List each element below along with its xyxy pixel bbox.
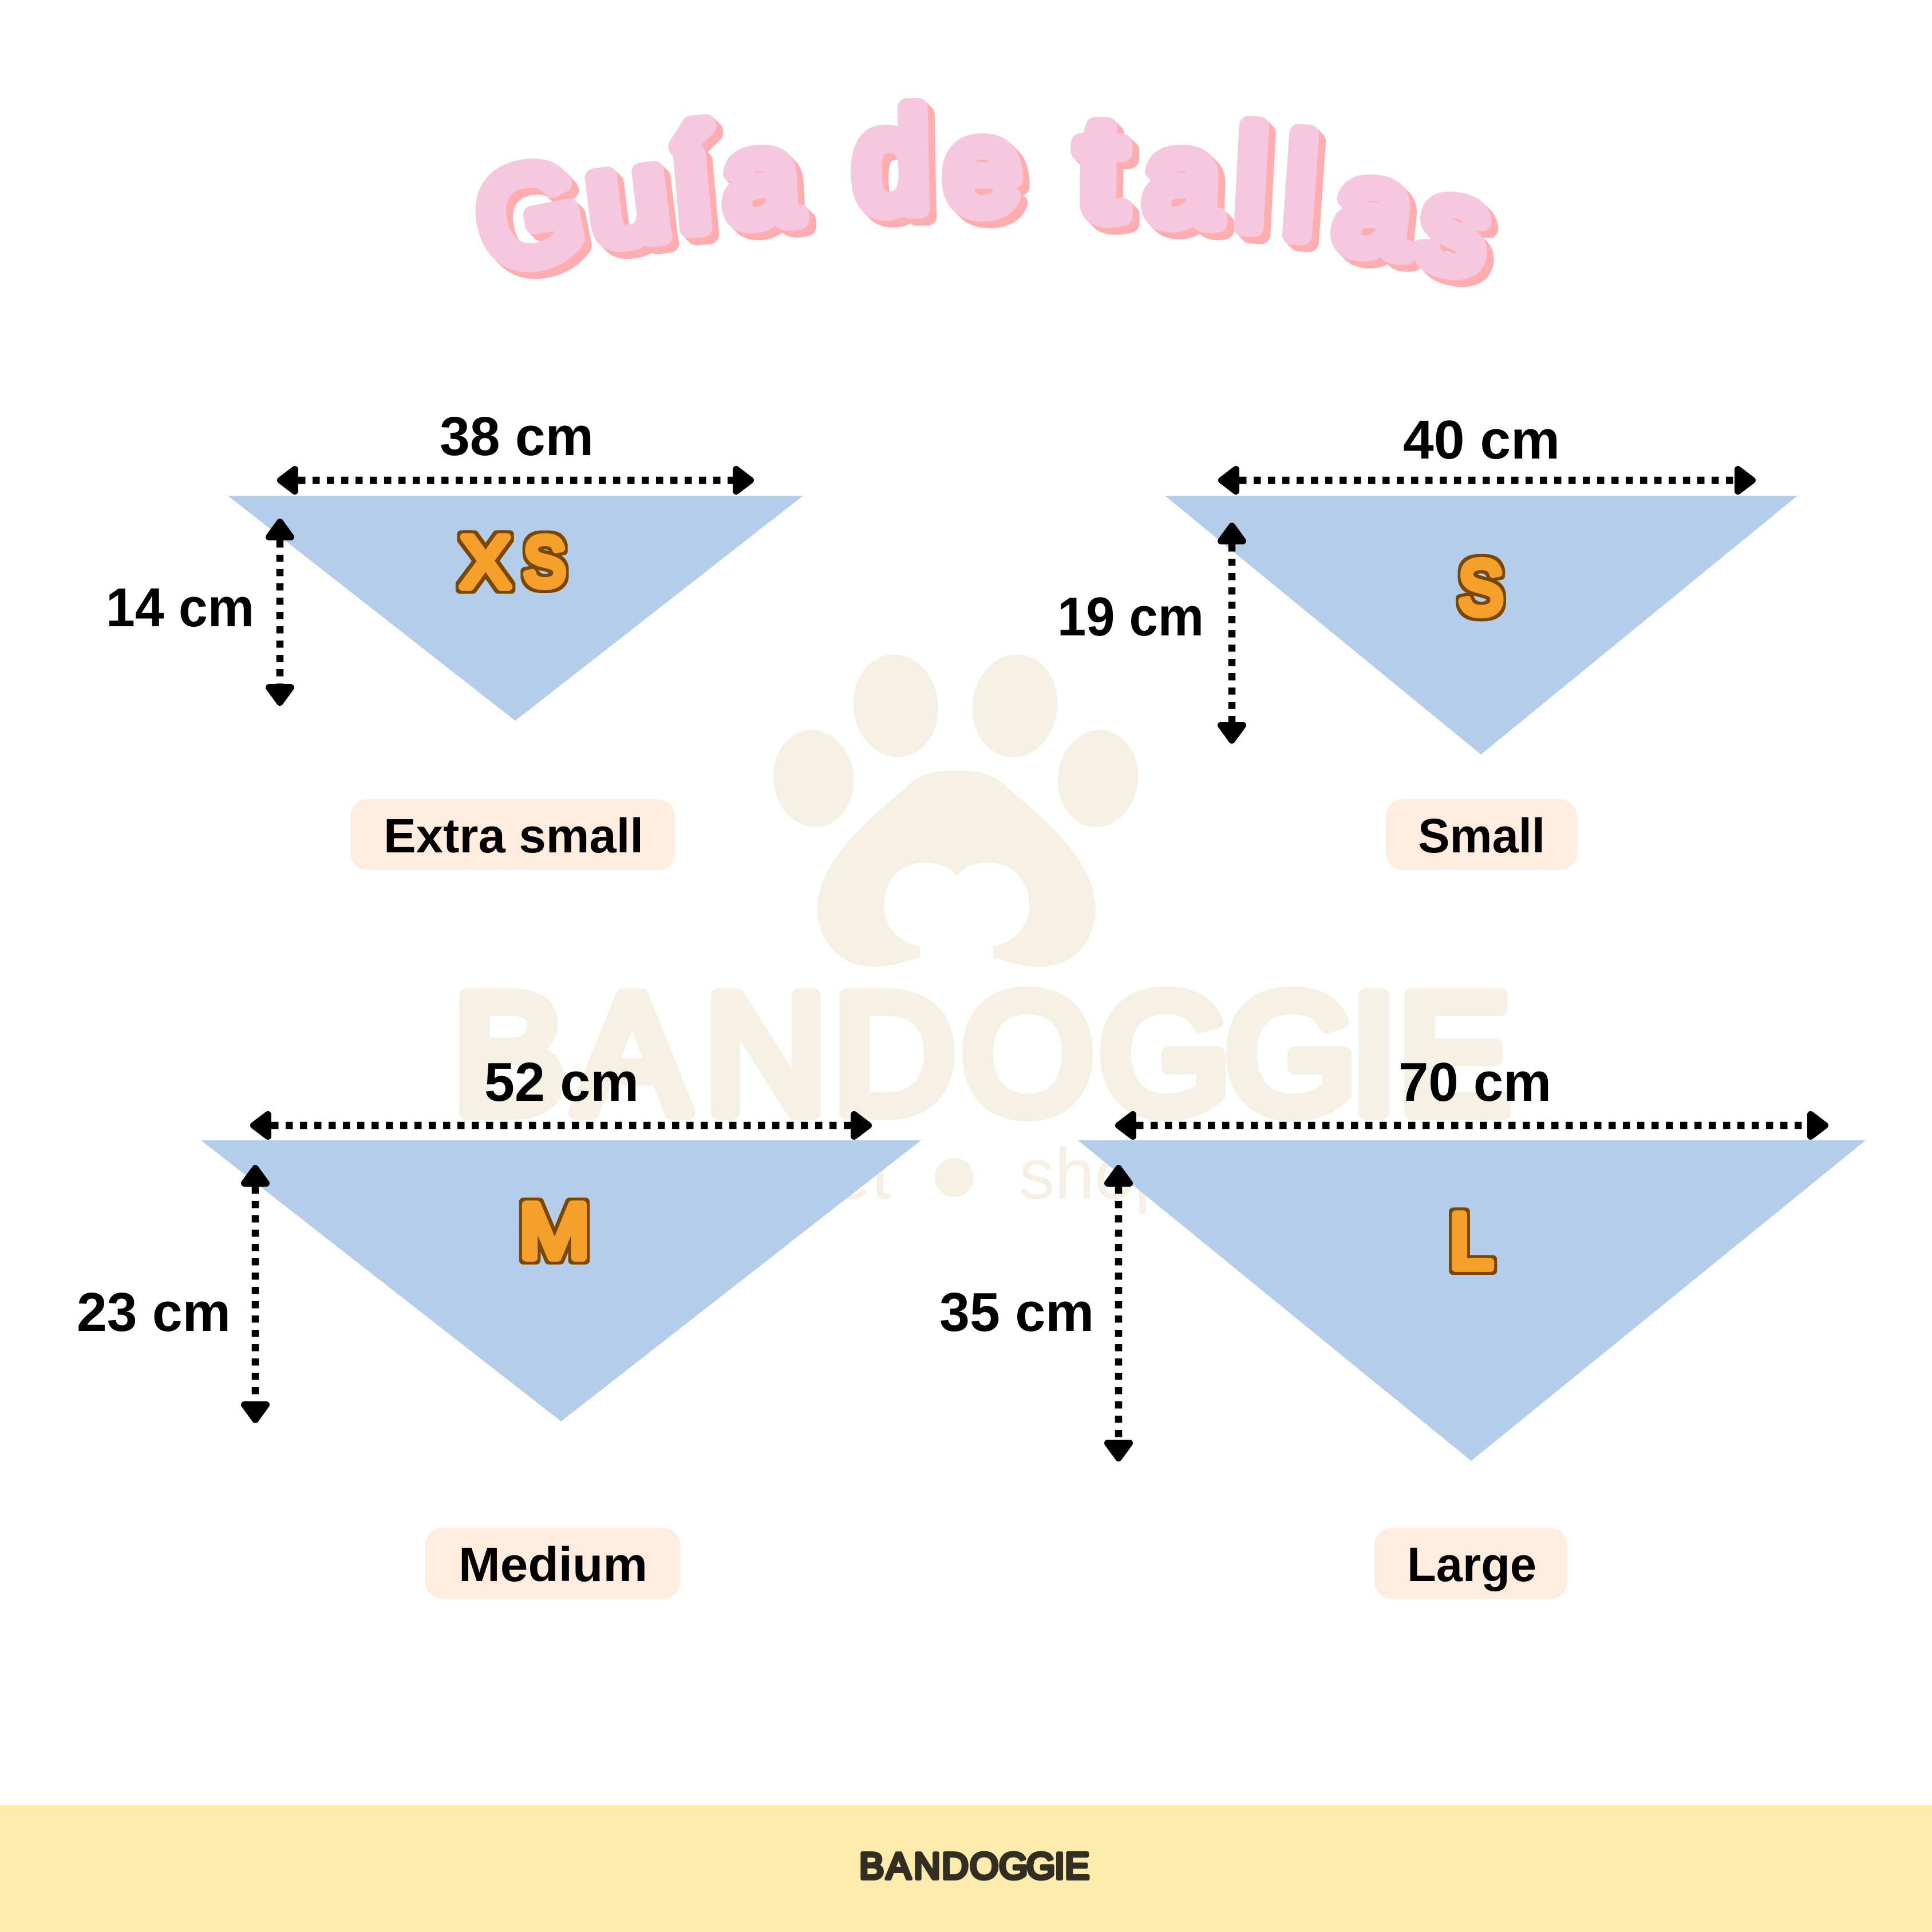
width label L: 70 cm xyxy=(1398,1052,1551,1113)
height label M: 23 cm xyxy=(77,1282,231,1343)
bandana triangle XS xyxy=(228,496,803,721)
width arrow XS xyxy=(280,469,750,491)
size letter S: S xyxy=(1459,546,1503,630)
width arrow S xyxy=(1222,469,1752,491)
footer band xyxy=(0,1805,1932,1932)
watermark tagline dot xyxy=(935,1158,974,1197)
title: í xyxy=(665,101,718,260)
size letter L: L xyxy=(1449,1198,1493,1285)
size name pill S xyxy=(1386,799,1577,870)
size name pill XS: Extra small xyxy=(384,809,643,863)
size name pill M xyxy=(425,1528,680,1599)
panel: L bandana xyxy=(939,1052,1866,1599)
title: a xyxy=(720,106,801,252)
title xyxy=(465,82,1499,302)
panel: S bandana xyxy=(1057,409,1797,870)
height arrow M xyxy=(244,1168,266,1420)
title: t xyxy=(1078,90,1125,247)
title: G xyxy=(465,133,594,298)
panel: XS bandana xyxy=(106,406,803,870)
title: e xyxy=(945,96,1020,239)
panel: M bandana xyxy=(77,1052,921,1599)
title: d xyxy=(853,82,930,240)
watermark: Bandoggie logo xyxy=(453,650,1511,1214)
title: a xyxy=(1329,134,1418,283)
size letters XS: S xyxy=(524,524,566,600)
height label S: 19 cm xyxy=(1057,586,1204,647)
height label L: 35 cm xyxy=(939,1282,1094,1343)
bandana triangle L xyxy=(1078,1140,1866,1461)
width arrow M xyxy=(254,1115,868,1136)
size letters XS: X xyxy=(461,521,510,602)
width label XS: 38 cm xyxy=(440,406,594,467)
height arrow XS xyxy=(269,522,291,702)
width arrow L xyxy=(1119,1115,1825,1136)
title: l xyxy=(1281,108,1320,266)
title: l xyxy=(1232,101,1270,258)
size name pill L xyxy=(1374,1528,1567,1599)
bandana triangle M xyxy=(201,1140,921,1421)
size name pill L: Large xyxy=(1407,1538,1536,1591)
size letter M: M xyxy=(520,1188,590,1274)
size name pill XS xyxy=(350,799,675,870)
title: u xyxy=(580,121,675,272)
height label XS: 14 cm xyxy=(106,577,254,638)
icon: paw print xyxy=(768,650,1144,967)
width label S: 40 cm xyxy=(1403,409,1560,471)
size letters XS xyxy=(461,521,566,602)
watermark wordmark: BANDOGGIE xyxy=(453,959,1511,1148)
height arrow S xyxy=(1221,526,1243,740)
size name pill S: Small xyxy=(1418,809,1545,863)
width label M: 52 cm xyxy=(484,1052,639,1113)
watermark tagline right: shop xyxy=(1019,1135,1174,1214)
title: a xyxy=(1143,106,1222,251)
height arrow L xyxy=(1108,1168,1129,1458)
footer brand wordmark: BANDOGGIE xyxy=(859,1845,1089,1887)
bandana triangle S xyxy=(1165,496,1797,754)
watermark tagline left: pet xyxy=(792,1135,891,1214)
title: s xyxy=(1410,149,1499,302)
size name pill M: Medium xyxy=(459,1538,647,1591)
